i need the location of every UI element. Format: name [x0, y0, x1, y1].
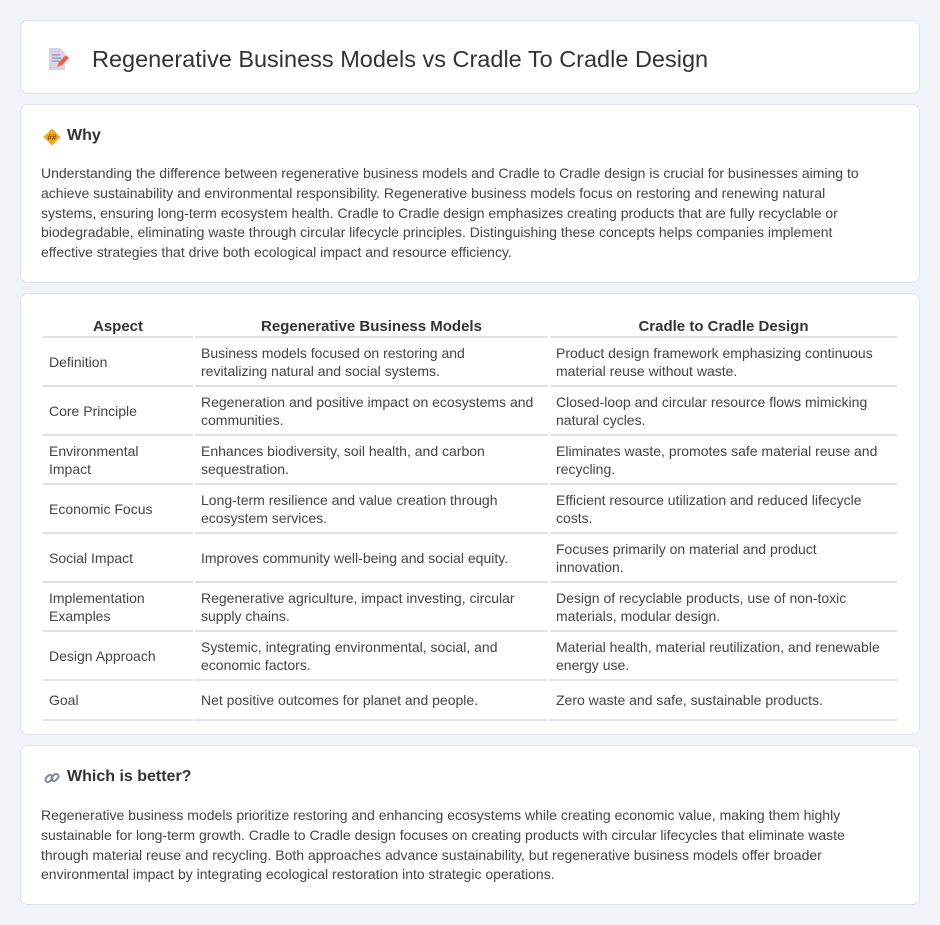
table: sequestration.	[201, 460, 289, 476]
table: Definition	[49, 354, 107, 370]
table: communities.	[201, 412, 283, 428]
icon: document	[49, 48, 69, 70]
table: Design of recyclable products, use of non-toxic	[556, 590, 846, 606]
panel: comparison table	[20, 293, 920, 735]
table: Aspect	[93, 318, 143, 335]
table: revitalizing natural and social systems.	[201, 362, 440, 378]
table: Goal	[49, 692, 79, 708]
table: Material health, material reutilization, and renewable	[556, 638, 880, 654]
which text: Regenerative business models prioritize restoring and enhancing ecosystems while creating economic value, making them highly sustainable for long-term growth. Cradle to Cradle design focuses on creating products with circular lifecycles that eliminate waste through material reuse and recycling. Both approaches advance sustainability, but regenerative business models offer broader environmental impact by integrating ecological restoration into strategic operations.	[41, 807, 845, 882]
panel: why	[20, 104, 920, 283]
table: recycling.	[556, 460, 615, 476]
table: economic factors.	[201, 656, 311, 672]
table: Implementation	[49, 590, 145, 606]
table: Regeneration and positive impact on ecosystems and	[201, 394, 533, 410]
table: Environmental	[49, 442, 138, 458]
title: Regenerative Business Models vs Cradle To Cradle Design	[92, 46, 708, 72]
table: Focuses primarily on material and product	[556, 540, 817, 556]
table: natural cycles.	[556, 412, 645, 428]
table: Efficient resource utilization and reduced lifecycle	[556, 492, 862, 508]
table: Improves community well-being and social equity.	[201, 550, 508, 566]
why text: Understanding the difference between regenerative business models and Cradle to Cradle design is crucial for businesses aiming to achieve sustainability and environmental responsibility. Regenerative business models focus on restoring and renewing natural systems, ensuring long-term ecosystem health. Cradle to Cradle design emphasizes creating products that are fully recyclable or biodegradable, eliminating waste through circular lifecycle principles. Distinguishing these concepts helps companies implement effective strategies that drive both ecological impact and resource efficiency.	[41, 165, 859, 260]
table: Business models focused on restoring and	[201, 344, 465, 360]
icon: diamond: ##	[48, 133, 57, 142]
table: materials, modular design.	[556, 608, 720, 624]
panel: which is better	[20, 745, 920, 905]
heading: why: Why	[67, 127, 101, 144]
table: Impact	[49, 460, 91, 476]
table: material reuse without waste.	[556, 362, 737, 378]
table: Enhances biodiversity, soil health, and carbon	[201, 442, 485, 458]
table: ecosystem services.	[201, 510, 327, 526]
table: Systemic, integrating environmental, social, and	[201, 638, 497, 654]
header card	[20, 20, 920, 94]
table: Cradle to Cradle Design	[638, 318, 809, 335]
icon: link	[44, 773, 60, 783]
table: Eliminates waste, promotes safe material reuse and	[556, 442, 877, 458]
table	[43, 318, 897, 721]
table: Zero waste and safe, sustainable products.	[556, 692, 823, 708]
table: Economic Focus	[49, 500, 152, 516]
table: Examples	[49, 608, 110, 624]
table: Design Approach	[49, 648, 156, 664]
table: Net positive outcomes for planet and people.	[201, 692, 478, 708]
table: Product design framework emphasizing continuous	[556, 344, 873, 360]
table: Regenerative Business Models	[261, 318, 482, 335]
table: energy use.	[556, 656, 629, 672]
table: supply chains.	[201, 608, 290, 624]
table: Closed-loop and circular resource flows mimicking	[556, 394, 867, 410]
table: Long-term resilience and value creation through	[201, 492, 498, 508]
table: innovation.	[556, 558, 624, 574]
icon: diamond	[44, 128, 60, 146]
heading: which is better: Which is better?	[67, 768, 191, 785]
table: Core Principle	[49, 402, 137, 418]
table: Social Impact	[49, 550, 133, 566]
table: Regenerative agriculture, impact investing, circular	[201, 590, 515, 606]
table: costs.	[556, 510, 593, 526]
